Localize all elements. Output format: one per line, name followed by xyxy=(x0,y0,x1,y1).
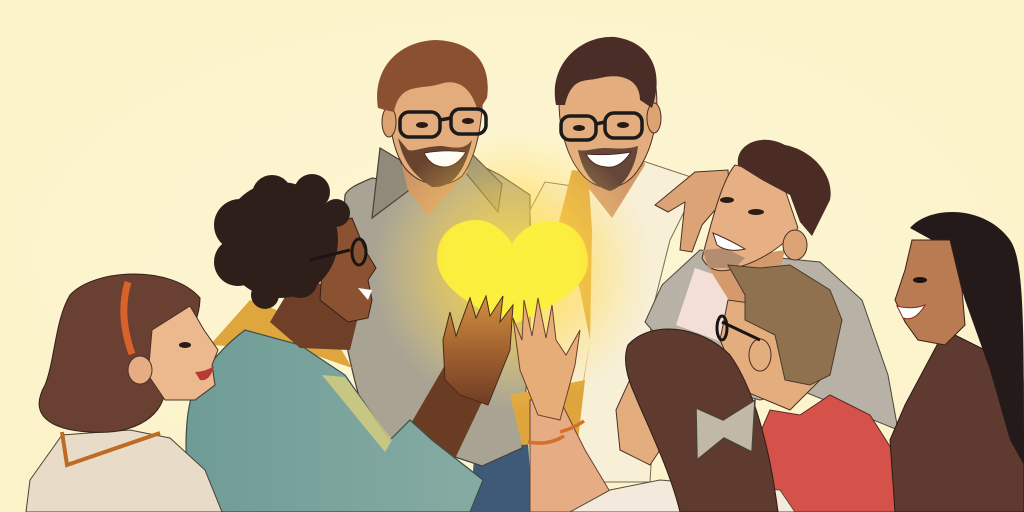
face xyxy=(559,60,657,188)
face xyxy=(616,375,680,465)
figure: woman with bow xyxy=(570,329,795,512)
ear xyxy=(783,230,807,260)
figure: red shirt boy xyxy=(717,265,914,512)
glow xyxy=(372,130,652,410)
arm and hand xyxy=(655,170,730,252)
figure: bracelet arm xyxy=(513,298,612,512)
glasses xyxy=(400,109,486,137)
forearm xyxy=(410,365,490,465)
hand xyxy=(513,298,580,420)
grey hoodie xyxy=(645,250,898,430)
brown jacket xyxy=(890,330,1024,512)
hair xyxy=(39,274,200,432)
sweater xyxy=(26,430,222,512)
hair xyxy=(910,212,1024,465)
glasses xyxy=(717,316,760,340)
figure: right woman xyxy=(890,212,1024,512)
neck xyxy=(270,275,362,350)
hair xyxy=(377,40,488,112)
headband xyxy=(124,282,132,354)
collar xyxy=(372,148,502,218)
pink undershirt xyxy=(676,268,780,342)
smile xyxy=(586,152,631,167)
glasses xyxy=(561,113,642,140)
sweater xyxy=(186,330,483,512)
collar trim xyxy=(62,432,160,465)
face xyxy=(390,60,482,184)
hair xyxy=(555,37,657,108)
smile xyxy=(897,305,925,319)
eyes xyxy=(416,118,474,128)
figure: left woman xyxy=(26,274,222,512)
beard xyxy=(398,138,472,187)
neck xyxy=(705,250,785,310)
ear xyxy=(382,107,396,137)
face xyxy=(702,165,798,271)
jeans xyxy=(470,440,532,512)
beard xyxy=(578,146,638,191)
ear xyxy=(749,339,771,371)
bracelets xyxy=(528,421,584,443)
face xyxy=(895,240,965,345)
hair xyxy=(728,265,842,385)
hand xyxy=(443,296,513,405)
hair xyxy=(626,329,778,512)
white shirt xyxy=(530,160,700,482)
heart xyxy=(437,220,588,325)
red shirt xyxy=(757,395,914,512)
eyes xyxy=(720,197,764,215)
orange scarf xyxy=(558,170,592,435)
figure: back right man xyxy=(510,37,700,482)
smile xyxy=(713,233,745,250)
glasses xyxy=(310,239,366,265)
ear xyxy=(647,103,661,133)
stubble xyxy=(703,248,745,268)
curly hair xyxy=(214,174,350,309)
face xyxy=(320,218,376,322)
neck xyxy=(398,145,468,216)
hair xyxy=(738,140,831,236)
grey shirt xyxy=(338,160,530,466)
eyes xyxy=(573,122,629,131)
face xyxy=(720,300,820,410)
orange scarf behind xyxy=(210,300,352,368)
figure: right man xyxy=(645,140,898,430)
ear xyxy=(128,356,152,384)
face xyxy=(148,306,218,400)
smile xyxy=(424,151,466,167)
sleeve highlight xyxy=(322,375,392,452)
eye xyxy=(913,277,927,283)
white top xyxy=(570,480,795,512)
lips xyxy=(195,366,214,380)
figure: teal sweater person xyxy=(186,174,513,512)
figure: back left man xyxy=(338,40,532,512)
bow xyxy=(696,400,755,460)
scarf lower xyxy=(510,380,585,445)
eye xyxy=(179,342,191,348)
arm xyxy=(530,400,612,512)
smile xyxy=(358,288,372,300)
neck xyxy=(582,140,645,218)
